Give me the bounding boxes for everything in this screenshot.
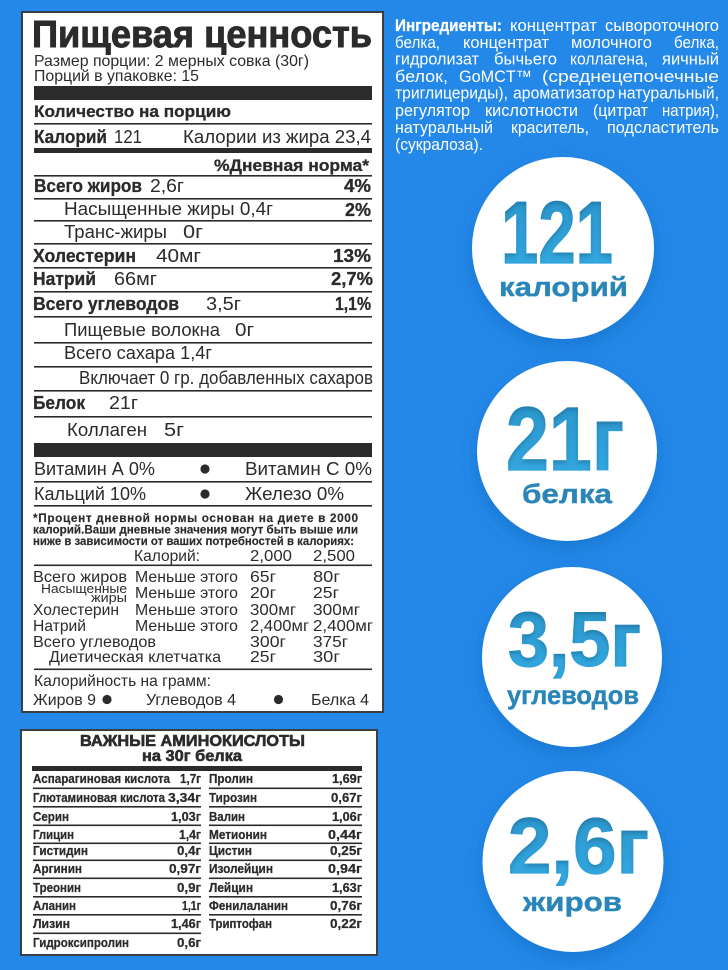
- table: daily value reference: 25г: [250, 649, 276, 666]
- row: total fat: [34, 176, 371, 196]
- row: collagen: Коллаген: [67, 420, 147, 440]
- table: amino acid left column: Аргинин: [33, 862, 82, 876]
- table: daily value reference: Диетическая клетчатка: [49, 649, 221, 666]
- row: calories: Калорий: [34, 127, 107, 147]
- text block: calories per gram: Калорийность на грамм:: [34, 673, 211, 690]
- badge: 3.5 g carbohydrates: [482, 567, 662, 747]
- text block: ingredients: натрия),: [662, 102, 719, 120]
- row: sodium: 2,7%: [331, 269, 373, 289]
- row: minerals: Железо 0%: [245, 484, 344, 504]
- table: amino acid left column: Аспарагиновая кислота: [33, 772, 171, 786]
- table: daily value reference: жиры: [91, 590, 127, 605]
- table: amino acid left column: [33, 772, 201, 950]
- text block: calories per gram: Жиров 9: [33, 692, 96, 709]
- table: amino acid left column: Аланин: [33, 899, 76, 913]
- table: amino acid left column: 3,34г: [168, 791, 201, 805]
- text block: ingredients: молочного: [571, 34, 652, 52]
- text block: ingredients: бычьего: [494, 50, 557, 68]
- table: amino acid left column: Треонин: [33, 881, 81, 895]
- table: amino acid right column: 1,06г: [332, 810, 362, 824]
- text block: ingredients: триглицериды),: [395, 84, 508, 102]
- row: dietary fibre: Пищевые волокна: [64, 320, 221, 340]
- badge: 121 calories: калорий: [499, 272, 628, 302]
- row: trans fat: Транс-жиры: [64, 222, 167, 242]
- table: amino acid left column: Глицин: [33, 828, 74, 842]
- row: total carbohydrates: [33, 294, 371, 314]
- panel: amino acids: [21, 730, 377, 955]
- text block: ingredients: концентрат: [510, 17, 597, 35]
- row: vitamins: Витамин А 0%: [34, 459, 155, 479]
- row: calories: Калории из жира 23,4: [183, 127, 371, 147]
- row: total carbohydrates: 3,5г: [206, 294, 241, 314]
- table: amino acid right column: Фенилаланин: [209, 899, 288, 913]
- table: daily value reference: [33, 548, 373, 666]
- row: vitamins: [34, 459, 372, 479]
- row: trans fat: 0г: [183, 222, 204, 242]
- text block: ingredients: белка,: [674, 34, 719, 52]
- row: calories: [34, 127, 371, 147]
- table: amino acid left column: 1,46г: [171, 917, 201, 931]
- table: amino acid right column: Лейцин: [209, 881, 253, 895]
- row: amount per serving: Количество на порцию: [34, 102, 231, 121]
- table: amino acid right column: Пролин: [209, 772, 253, 786]
- row: saturated fat: [64, 199, 371, 220]
- row: daily value header: %Дневная норма*: [214, 156, 369, 175]
- table: daily value reference: Калорий:: [134, 548, 200, 565]
- text block: calories per gram: Белка 4: [311, 692, 369, 709]
- table: amino acid right column: Тирозин: [209, 791, 257, 805]
- text block: footnote: *Процент дневной нормы основан на диете в 2000: [33, 511, 358, 525]
- table: daily value reference: Меньше этого: [135, 585, 238, 602]
- text block: ingredients: (среднецепочечные: [542, 68, 719, 86]
- table: amino acid left column: 0,97г: [169, 862, 201, 876]
- table: daily value reference: 300мг: [313, 602, 360, 619]
- text block: footnote: ниже в зависимости от ваших потребностей в калориях:: [33, 534, 354, 548]
- row: sodium: 66мг: [114, 269, 157, 289]
- heading: amino acids title: [80, 733, 305, 765]
- text block: ingredients: гидролизат: [395, 50, 479, 68]
- row: cholesterol: [33, 246, 371, 266]
- badge: 2.6 g fat: 2,6г: [508, 801, 649, 890]
- table: amino acid left column: 1,03г: [171, 810, 201, 824]
- table: daily value reference: 2,000: [250, 548, 292, 565]
- table: amino acid right column: Цистин: [209, 844, 252, 858]
- heading: nutrition facts title: Пищевая ценность: [32, 14, 372, 56]
- table: amino acid right column: 0,25г: [330, 844, 362, 858]
- row: sodium: Натрий: [33, 269, 96, 289]
- text block: ingredients: коллагена,: [570, 50, 648, 68]
- text block: calories per gram: Углеводов 4: [146, 692, 236, 709]
- heading: amino acids title: ВАЖНЫЕ АМИНОКИСЛОТЫ: [80, 733, 305, 750]
- table: daily value reference: 2,400мг: [313, 618, 373, 635]
- row: minerals: Кальций 10%: [34, 484, 146, 504]
- table: daily value reference: 375г: [313, 634, 348, 651]
- text block: ingredients: краситель,: [511, 119, 589, 137]
- table: daily value reference: Меньше этого: [135, 618, 238, 635]
- text block: ingredients: Ингредиенты:: [395, 17, 502, 35]
- row: dietary fibre: 0г: [235, 320, 254, 340]
- badge: 2.6 g fat: жиров: [522, 887, 622, 917]
- table: daily value reference: 2,500: [313, 548, 355, 565]
- table: daily value reference: 80г: [313, 569, 340, 586]
- table: amino acid right column: Валин: [209, 810, 245, 824]
- row: protein: [33, 393, 138, 413]
- text block: ingredients: белок,: [395, 68, 448, 86]
- table: amino acid right column: 0,67г: [331, 791, 362, 805]
- text block: ingredients: (сукралоза).: [395, 136, 483, 154]
- row: sodium: [33, 269, 373, 289]
- row: vitamins: Витамин С 0%: [245, 459, 372, 479]
- text block: serving info: Порций в упаковке: 15: [34, 68, 199, 85]
- panel: nutrition facts: [22, 12, 383, 712]
- text block: ingredients: сывороточного: [605, 17, 719, 35]
- row: protein: Белок: [33, 393, 86, 413]
- table: amino acid left column: Серин: [33, 810, 69, 824]
- row: collagen: 5г: [164, 420, 185, 440]
- text block: ingredients: регулятор: [395, 102, 470, 120]
- row: minerals: [34, 484, 344, 504]
- table: daily value reference: Всего жиров: [33, 569, 127, 586]
- table: amino acid right column: 1,63г: [332, 881, 362, 895]
- table: daily value reference: Холестерин: [33, 602, 119, 619]
- table: daily value reference: Насыщенные: [41, 581, 127, 596]
- row: total sugar: Всего сахара 1,4г: [64, 343, 212, 363]
- text block: ingredients: подсластитель: [607, 119, 719, 137]
- row: added sugars: Включает 0 гр. добавленных сахаров: [79, 368, 373, 388]
- text block: ingredients: ароматизатор: [513, 84, 615, 102]
- badge: 3.5 g carbohydrates: 3,5г: [508, 597, 641, 683]
- table: amino acid right column: 0,22г: [330, 917, 362, 931]
- row: total carbohydrates: 1,1%: [335, 294, 371, 314]
- text block: ingredients: яичный: [662, 50, 719, 68]
- row: total fat: 4%: [344, 176, 371, 196]
- row: cholesterol: Холестерин: [33, 246, 136, 266]
- text block: serving info: Размер порции: 2 мерных совка (30г): [34, 53, 309, 70]
- table: daily value reference: 2,400мг: [250, 618, 309, 635]
- table: amino acid left column: 0,6г: [177, 936, 201, 950]
- table: daily value reference: Натрий: [33, 618, 86, 635]
- table: amino acid left column: Лизин: [33, 917, 70, 931]
- row: cholesterol: 13%: [333, 246, 371, 266]
- badge: 3.5 g carbohydrates: углеводов: [507, 680, 639, 710]
- row: total fat: 2,6г: [150, 176, 184, 196]
- table: amino acid left column: 1,7г: [180, 772, 201, 786]
- table: daily value reference: Всего углеводов: [33, 634, 156, 651]
- text block: ingredients: концентрат: [463, 34, 549, 52]
- table: daily value reference: 30г: [313, 649, 340, 666]
- row: saturated fat: Насыщенные жиры 0,4г: [64, 199, 273, 219]
- badge: 21 g protein: белка: [522, 479, 613, 509]
- text block: ingredients: GoMCT™: [459, 68, 532, 86]
- row: total carbohydrates: Всего углеводов: [33, 294, 179, 314]
- text block: ingredients: (цитрат: [593, 102, 648, 120]
- table: daily value reference: Меньше этого: [135, 569, 238, 586]
- badge: 21 g protein: [477, 361, 657, 541]
- text block: footnote: [33, 511, 358, 548]
- row: cholesterol: 40мг: [156, 246, 201, 266]
- table: amino acid left column: Гидроксипролин: [33, 936, 129, 950]
- badge: 21 g protein: 21г: [506, 390, 624, 490]
- row: calories: 121: [114, 127, 142, 147]
- text block: footnote: калорий.Ваши дневные значения могут быть выше или: [33, 522, 358, 536]
- text block: ingredients: [395, 17, 719, 154]
- table: daily value reference: Меньше этого: [135, 602, 238, 619]
- table: daily value reference: 25г: [313, 585, 339, 602]
- text block: ingredients: кислотности: [485, 102, 578, 120]
- heading: amino acids title: на 30г белка: [142, 748, 242, 765]
- table: amino acid left column: 0,9г: [177, 881, 201, 895]
- table: amino acid right column: Метионин: [209, 828, 267, 842]
- table: daily value reference: 65г: [250, 569, 276, 586]
- table: amino acid left column: Глютаминовая кислота: [33, 791, 166, 805]
- badge: 2.6 g fat: [482, 771, 664, 952]
- table: daily value reference: 300г: [250, 634, 286, 651]
- table: daily value reference: 300мг: [250, 602, 296, 619]
- table: amino acid right column: [209, 772, 362, 931]
- table: amino acid left column: Гистидин: [33, 844, 88, 858]
- table: amino acid right column: Изолейцин: [209, 862, 273, 876]
- badge: 121 calories: 121: [501, 183, 613, 282]
- table: amino acid right column: 0,76г: [330, 899, 362, 913]
- badge: 121 calories: [472, 157, 654, 339]
- table: amino acid right column: 0,44г: [328, 828, 362, 842]
- table: amino acid left column: 1,4г: [179, 828, 201, 842]
- text block: ingredients: натуральный: [395, 119, 493, 137]
- row: collagen: [67, 420, 185, 440]
- text block: serving info: [34, 53, 309, 85]
- table: daily value reference: 20г: [250, 585, 276, 602]
- row: protein: 21г: [109, 393, 138, 413]
- table: amino acid right column: 1,69г: [332, 772, 362, 786]
- text block: ingredients: натуральный,: [618, 84, 719, 102]
- table: amino acid left column: 1,1г: [182, 899, 201, 913]
- table: amino acid right column: Триптофан: [209, 917, 272, 931]
- row: saturated fat: 2%: [345, 200, 371, 220]
- row: total fat: Всего жиров: [34, 176, 142, 196]
- table: amino acid left column: 0,4г: [177, 844, 201, 858]
- table: amino acid right column: 0,94г: [328, 862, 362, 876]
- text block: ingredients: белка,: [395, 34, 440, 52]
- text block: calories per gram: [33, 673, 369, 709]
